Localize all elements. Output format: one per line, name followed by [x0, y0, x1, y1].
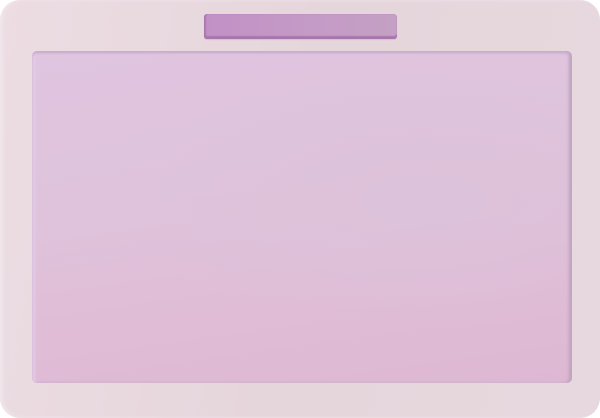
panel: inner screen	[32, 51, 572, 383]
title bar: empty purple plate	[204, 14, 397, 39]
